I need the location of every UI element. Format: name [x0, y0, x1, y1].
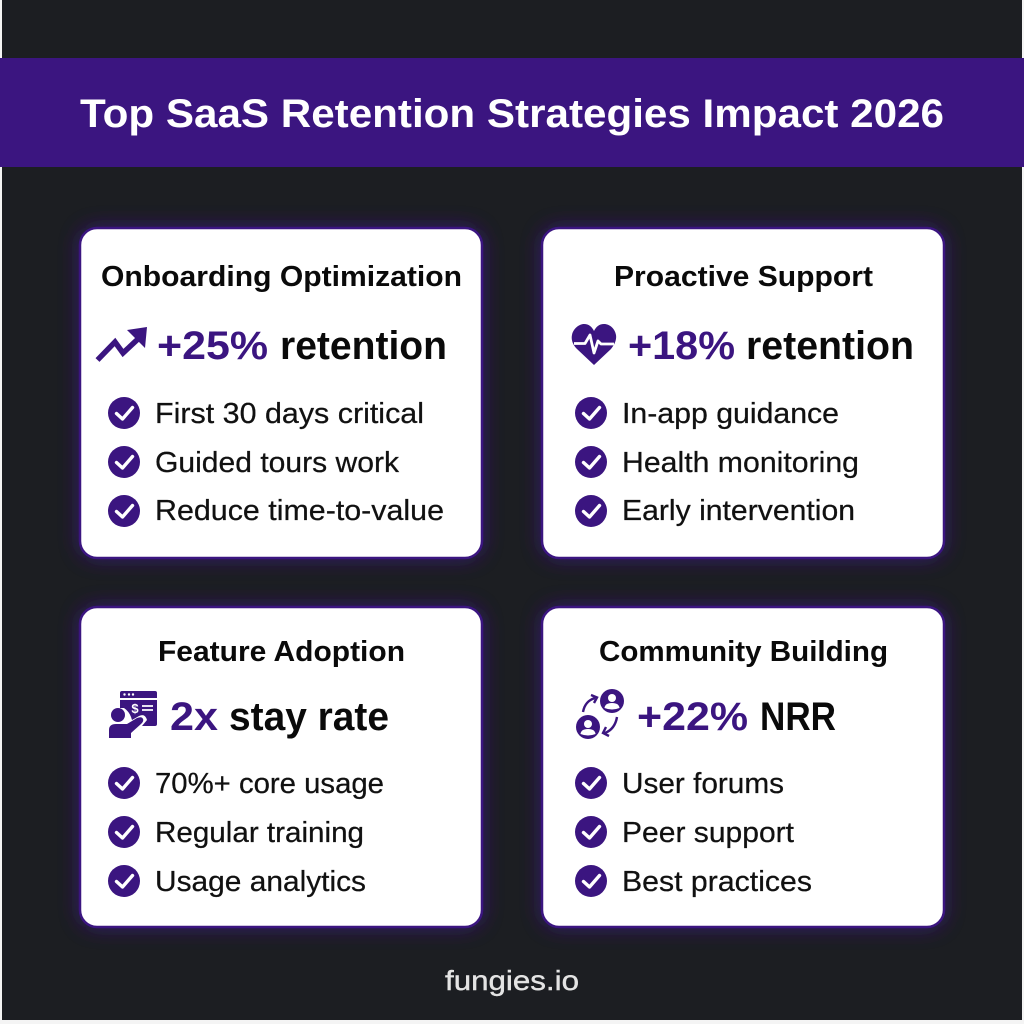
footer brand: fungies.io — [445, 965, 579, 996]
stat: +25% — [157, 324, 268, 368]
list: 70%+ core usage — [155, 768, 384, 800]
stat: +18% — [628, 324, 735, 368]
list: Usage analytics — [155, 866, 366, 898]
panel: feature adoption — [79, 606, 483, 928]
list: First 30 days critical — [155, 398, 424, 430]
list: In-app guidance — [622, 398, 839, 430]
list: Early intervention — [622, 495, 855, 527]
list: Reduce time-to-value — [155, 495, 444, 527]
stat — [628, 324, 914, 368]
stat: retention — [280, 324, 447, 368]
list: User forums — [622, 768, 784, 800]
stat: stay rate — [229, 695, 389, 739]
heading: Feature Adoption — [158, 636, 405, 668]
icon: dashboard and user: $ — [131, 701, 139, 716]
icon: heart pulse — [572, 324, 616, 365]
stat: NRR — [760, 695, 836, 739]
icon: community exchange — [576, 689, 624, 739]
list — [575, 397, 859, 527]
list — [108, 397, 444, 527]
heading: Proactive Support — [614, 261, 873, 293]
heading: Onboarding Optimization — [101, 261, 462, 293]
panel: onboarding optimization — [79, 227, 483, 559]
list: Health monitoring — [622, 447, 859, 479]
heading: Community Building — [599, 636, 888, 668]
list — [575, 767, 812, 898]
list: Best practices — [622, 866, 812, 898]
stat: 2x — [170, 695, 218, 739]
panel: community building — [541, 606, 945, 928]
stat: +22% — [637, 695, 748, 739]
stat — [157, 324, 447, 368]
list: Guided tours work — [155, 447, 400, 479]
icon: trending arrow — [98, 327, 147, 360]
title: Top SaaS Retention Strategies Impact 2026 — [80, 92, 944, 136]
title banner — [0, 58, 1024, 167]
list — [108, 767, 384, 898]
stat — [637, 695, 836, 739]
list: Regular training — [155, 817, 364, 849]
icon: dashboard and user — [109, 691, 157, 738]
panel: proactive support — [541, 227, 945, 559]
stat: retention — [746, 324, 914, 368]
list: Peer support — [622, 817, 794, 849]
